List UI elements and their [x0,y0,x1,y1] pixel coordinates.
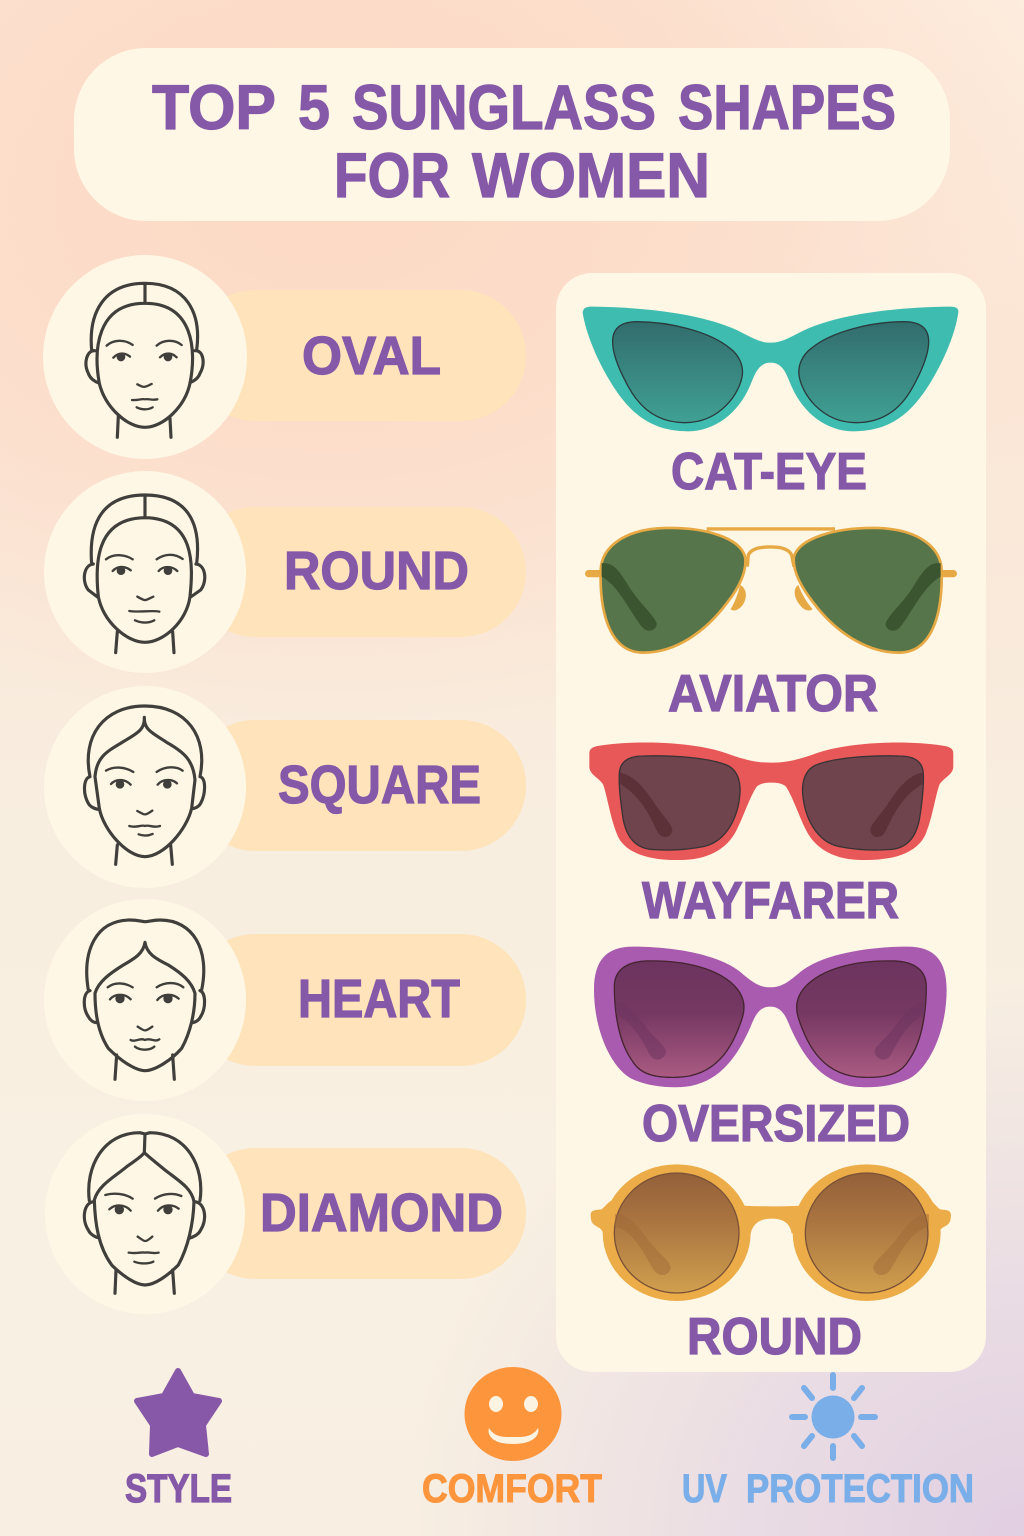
label: oval: OVAL [302,326,441,386]
panel: face shapes heart [44,899,526,1101]
icon: round sunglasses [591,1164,951,1301]
icon: oval face [86,283,203,437]
title banner [74,48,950,221]
icon: sun [792,1375,875,1458]
label: square: SQUARE [278,755,481,815]
title line 1: SHAPES [678,73,896,143]
icon: diamond face [84,1133,205,1293]
label: style: STYLE [125,1467,232,1511]
title line 2 [334,141,710,211]
label: uv protection: UV [682,1467,727,1511]
icon: wayfarer sunglasses [589,743,953,860]
title line 1: SUNGLASS [352,73,656,143]
icon: smiley face [464,1367,562,1461]
label: round: ROUND [284,541,469,601]
title line 2: WOMEN [472,141,710,211]
icon: round face [84,495,205,653]
panel: face shapes round [44,471,526,673]
icon: oversized sunglasses [594,947,947,1087]
title line 1 [152,73,896,143]
panel: face shapes oval [43,255,526,459]
label: uv protection: PROTECTION [746,1467,974,1511]
panel: face shapes square [44,686,526,888]
icon: aviator sunglasses [589,528,953,653]
icon: square face [84,706,205,864]
label: oversized: OVERSIZED [642,1095,910,1153]
icon: heart face [84,920,205,1079]
label: comfort: COMFORT [422,1467,602,1511]
title line 1: 5 [298,73,330,143]
label: heart: HEART [298,969,460,1029]
title line 1: TOP [152,73,276,143]
title line 2: FOR [334,141,450,211]
label: uv protection [682,1467,974,1511]
label: aviator: AVIATOR [668,665,878,723]
panel: face shapes diamond [45,1114,526,1314]
label: wayfarer: WAYFARER [642,872,899,930]
label: round sunglasses: ROUND [687,1308,862,1366]
panel: sunglass styles [556,273,986,1372]
label: cat-eye: CAT-EYE [671,443,867,501]
label: diamond: DIAMOND [260,1183,503,1243]
icon: star [137,1371,219,1454]
icon: cat-eye sunglasses [583,307,958,431]
